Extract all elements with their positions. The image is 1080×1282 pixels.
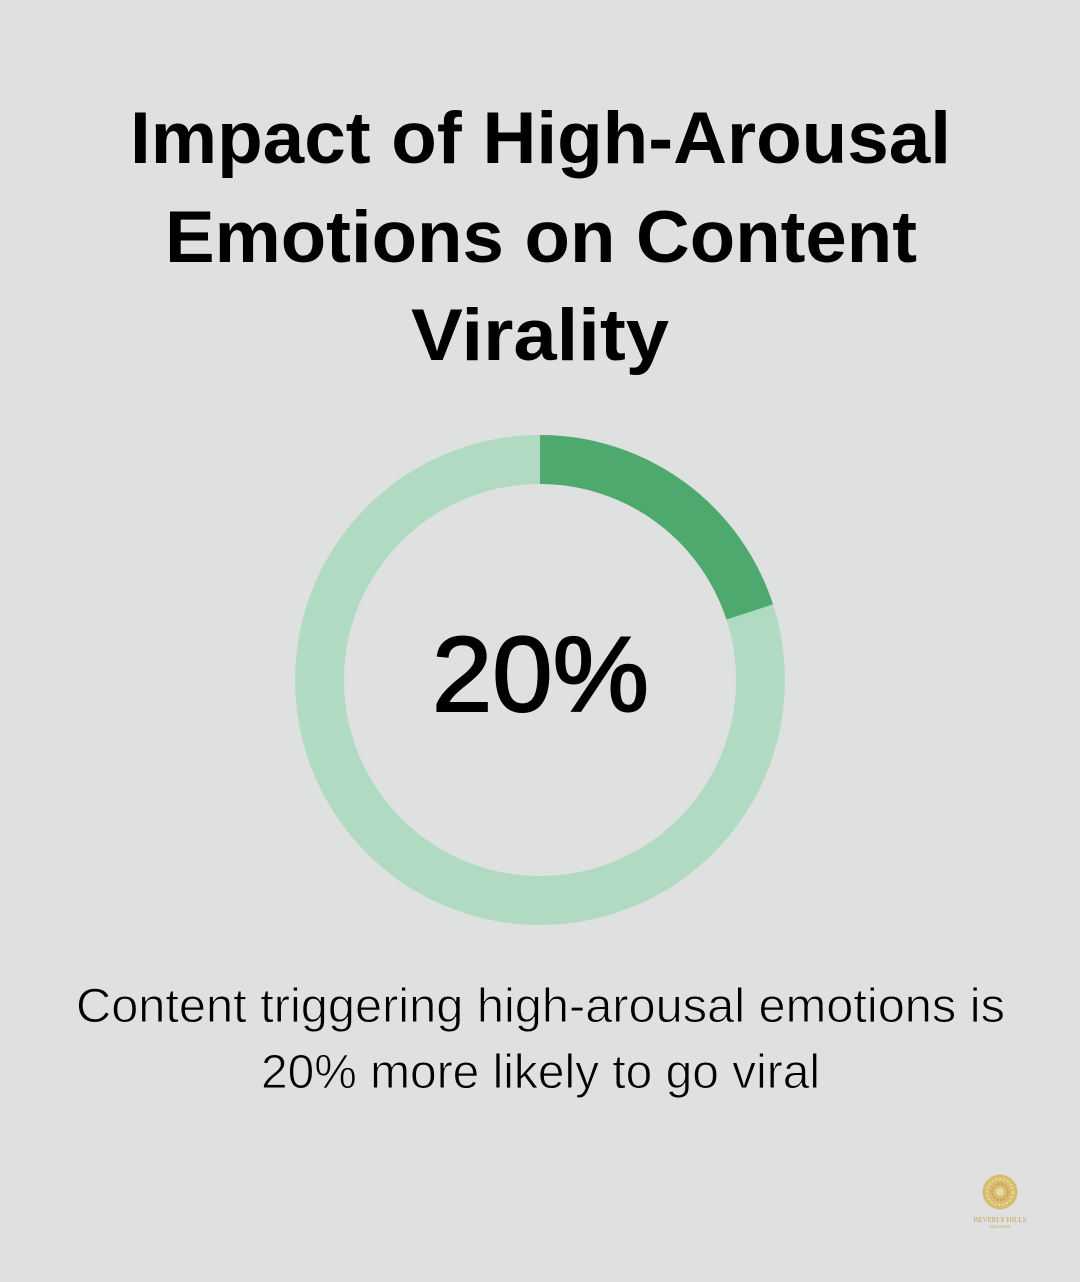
logo: Beverly Hills Magazine: MAGAZINE: [989, 1224, 1011, 1229]
title: Impact of High-Arousal: [130, 98, 951, 179]
description text: 20% more likely to go viral: [261, 1046, 820, 1099]
description text: [76, 980, 1005, 1099]
logo: Beverly Hills Magazine: [974, 1174, 1027, 1229]
center value: 20%: [432, 614, 649, 734]
logo: Beverly Hills Magazine: BEVERLY HILLS: [974, 1216, 1027, 1224]
description text: Content triggering high-arousal emotions is: [76, 980, 1005, 1033]
title: [130, 98, 951, 376]
title: Virality: [411, 295, 669, 376]
title: Emotions on Content: [165, 197, 917, 278]
donut chart: 20%: [320, 460, 760, 900]
